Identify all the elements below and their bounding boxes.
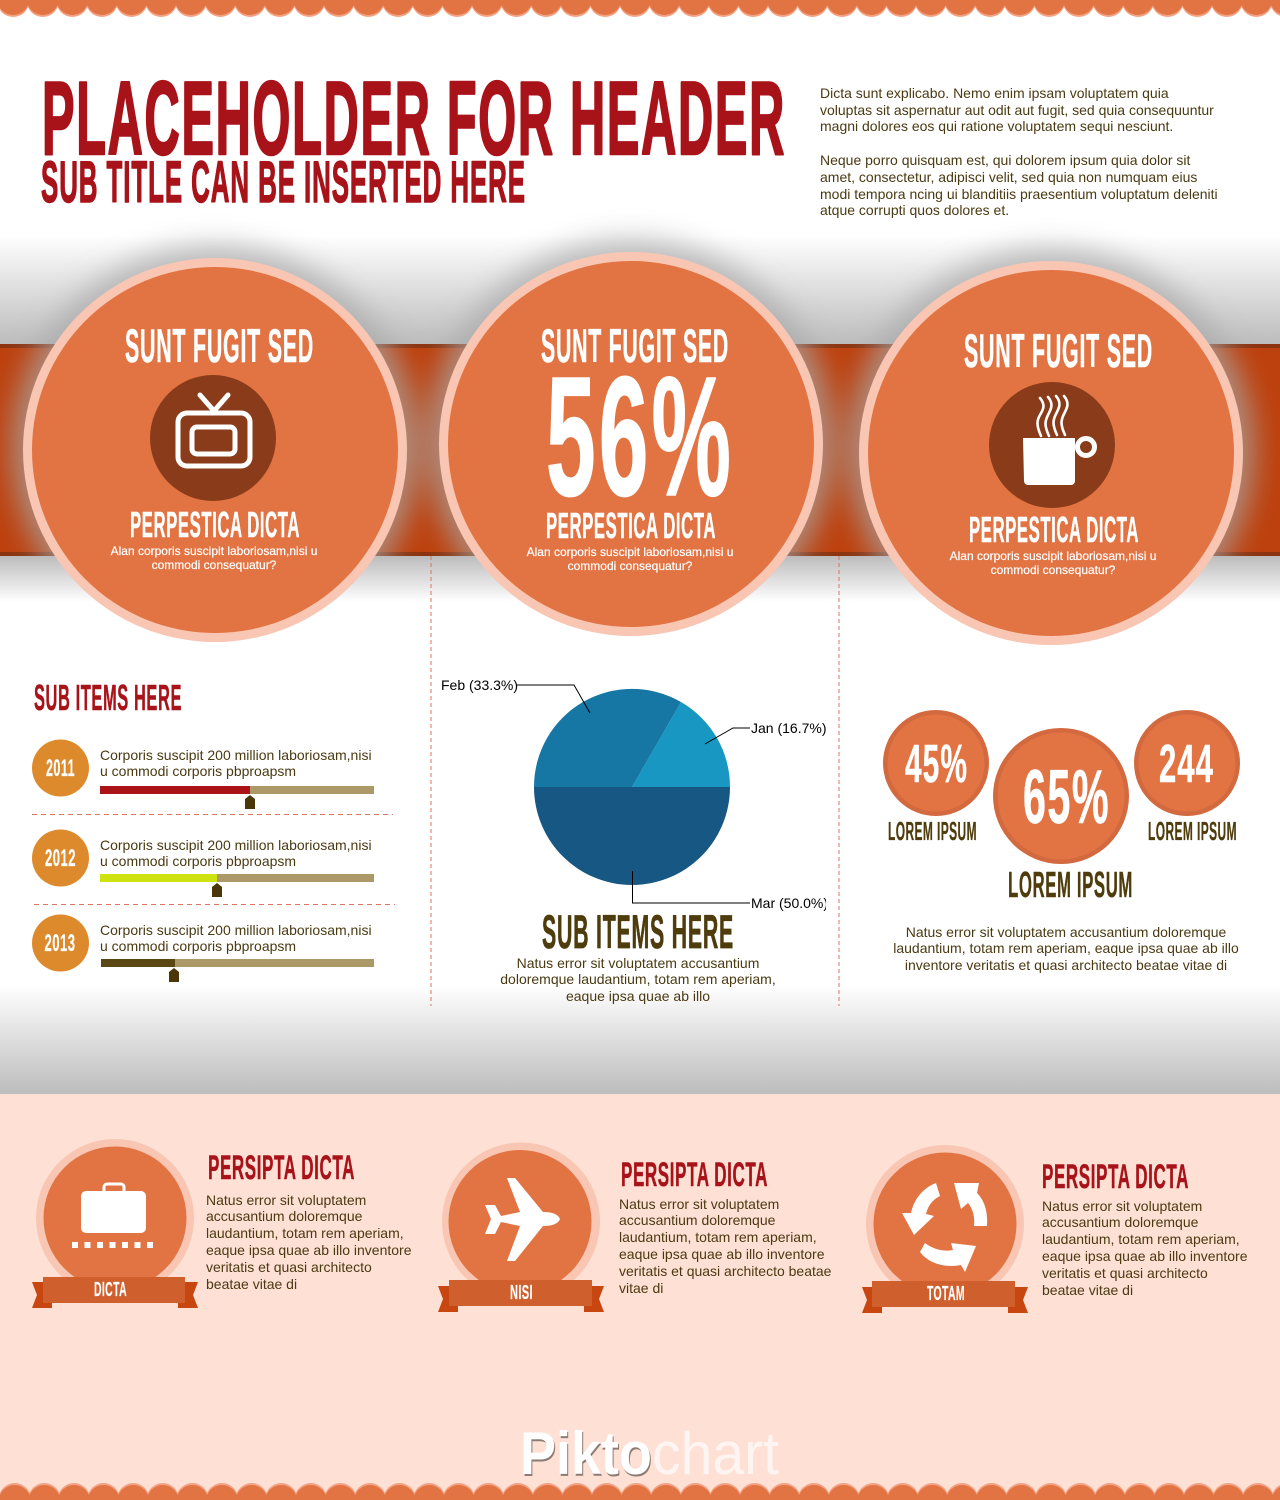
- panel: circle centre: SUNT FUGIT SED: [541, 319, 729, 372]
- text block: totam: beatae vitae di: [1042, 1282, 1133, 1298]
- text block: dicta: [206, 1149, 412, 1292]
- text block: nisi: laudantium, totam rem aperiam,: [619, 1229, 817, 1245]
- text block: dicta: beatae vitae di: [206, 1276, 297, 1292]
- text block: nisi: eaque ipsa quae ab illo inventore: [619, 1246, 825, 1262]
- item 2012: Corporis suscipit 200 million laboriosam,nisi: [100, 837, 372, 853]
- panel: pie chart: SUB ITEMS HERE: [542, 905, 734, 958]
- icon: suitcase: [72, 1184, 153, 1248]
- text block: nisi: accusantium doloremque: [619, 1212, 776, 1228]
- caption: right circle: commodi consequatur?: [991, 563, 1116, 577]
- panel: pie chart: [441, 677, 828, 1004]
- stat 45%: LOREM IPSUM: [888, 816, 977, 846]
- text: stats description: Natus error sit voluptatem accusantium doloremque: [906, 924, 1227, 940]
- intro text: Dicta sunt explicabo. Nemo enim ipsam voluptatem quia: [820, 85, 1169, 101]
- pie chart: Mar (50.0%): [751, 895, 828, 911]
- ribbon: dicta: DICTA: [94, 1279, 127, 1301]
- logo: Piktochart: Pikto: [521, 1422, 653, 1489]
- text: pie description: doloremque laudantium, totam rem aperiam,: [500, 971, 776, 987]
- stat 45%: [883, 710, 989, 846]
- panel: circle centre: PERPESTICA DICTA: [546, 505, 716, 546]
- panel: circle right: [859, 261, 1243, 645]
- caption: left circle: Alan corporis suscipit laboriosam,nisi u: [111, 544, 317, 558]
- intro text: atque corrupti quos dolores et.: [820, 202, 1009, 218]
- pie chart: Feb (33.3%): [441, 677, 518, 693]
- text: pie description: eaque ipsa quae ab illo: [566, 988, 710, 1004]
- text block: nisi: [619, 1156, 832, 1296]
- item 2013: [32, 914, 374, 982]
- ribbon: totam: [862, 1281, 1028, 1313]
- text block: totam: Natus error sit voluptatem: [1042, 1198, 1202, 1214]
- top scalloped border: [0, 0, 1280, 18]
- item 2012: u commodi corporis pbproapsm: [100, 853, 296, 869]
- text: stats description: inventore veritatis et quasi architecto beatae vitae di: [905, 957, 1227, 973]
- text block: totam: veritatis et quasi architecto: [1042, 1265, 1208, 1281]
- text block: nisi: vitae di: [619, 1280, 663, 1296]
- bottom scalloped border: [0, 1480, 1280, 1500]
- panel: circle left: [23, 258, 407, 642]
- stat 65%: [993, 728, 1133, 905]
- ribbon: nisi: [438, 1280, 604, 1312]
- text: stats description: laudantium, totam rem aperiam, eaque ipsa quae ab illo: [893, 940, 1239, 956]
- stat 65%: 65%: [1023, 755, 1110, 840]
- logo: Piktochart: [520, 1420, 779, 1489]
- item 2012: 2012: [45, 845, 76, 872]
- circle shadows: [0, 224, 1272, 556]
- text block: dicta: veritatis et quasi architecto: [206, 1259, 372, 1275]
- caption: left circle: commodi consequatur?: [152, 558, 277, 572]
- panel: timeline: SUB ITEMS HERE: [34, 677, 182, 718]
- caption: centre circle: Alan corporis suscipit laboriosam,nisi u: [527, 545, 733, 559]
- item 2011: u commodi corporis pbproapsm: [100, 763, 296, 779]
- panel: circle centre: [439, 252, 823, 636]
- ribbon band: [0, 344, 1280, 556]
- intro text: modi tempora ncing ui blanditiis praesentium voluptatum deleniti: [820, 186, 1218, 202]
- text block: nisi: veritatis et quasi architecto beatae: [619, 1263, 832, 1279]
- pie chart: Jan (16.7%): [751, 720, 826, 736]
- text block: totam: [1042, 1158, 1248, 1298]
- big number: 56%: [546, 342, 734, 532]
- panel: stats: [883, 710, 1240, 973]
- text: pie description: Natus error sit voluptatem accusantium: [517, 955, 759, 971]
- intro text: amet, consectetur, adipisci velit, sed quia non numquam eius: [820, 169, 1197, 185]
- icon: coffee cup: [989, 382, 1115, 508]
- item 2013: 2013: [44, 930, 76, 957]
- text: SUB TITLE CAN BE INSERTED HERE: [41, 150, 526, 215]
- intro text: magni dolores eos qui ratione voluptatem sequi nesciunt.: [820, 118, 1173, 134]
- item 2013: Corporis suscipit 200 million laboriosam,nisi: [100, 922, 372, 938]
- caption: centre circle: [527, 545, 733, 573]
- text block: dicta: eaque ipsa quae ab illo inventore: [206, 1242, 412, 1258]
- item 2011: [32, 740, 374, 809]
- text block: totam: laudantium, totam rem aperiam,: [1042, 1231, 1240, 1247]
- text block: dicta: accusantium doloremque: [206, 1208, 363, 1224]
- text block: dicta: Natus error sit voluptatem: [206, 1192, 366, 1208]
- text block: dicta: laudantium, totam rem aperiam,: [206, 1225, 404, 1241]
- pie chart: [441, 677, 828, 911]
- caption: right circle: Alan corporis suscipit laboriosam,nisi u: [950, 549, 1156, 563]
- ribbon: nisi: NISI: [510, 1282, 533, 1304]
- background bands: [0, 235, 1280, 1095]
- text block: dicta: PERSIPTA DICTA: [208, 1149, 355, 1187]
- icon: recycle arrows: [902, 1183, 987, 1272]
- text block: totam: eaque ipsa quae ab illo inventore: [1042, 1248, 1248, 1264]
- panel: circle left: SUNT FUGIT SED: [125, 319, 314, 372]
- intro text: [820, 85, 1218, 218]
- panel: bottom background: [0, 1094, 1280, 1500]
- icon: television: [150, 375, 276, 501]
- panel: circle left: PERPESTICA DICTA: [130, 504, 300, 545]
- text block: totam: accusantium doloremque: [1042, 1214, 1199, 1230]
- badge: dicta: [32, 1139, 198, 1308]
- stat 45%: 45%: [905, 734, 968, 794]
- caption: centre circle: commodi consequatur?: [568, 559, 693, 573]
- caption: right circle: [950, 549, 1156, 577]
- item 2011: 2011: [46, 755, 75, 782]
- item 2012: [32, 830, 374, 897]
- panel: timeline: [32, 677, 395, 982]
- text: stats description: [893, 924, 1239, 973]
- stat 244: [1134, 710, 1240, 846]
- intro text: voluptas sit aspernatur aut odit aut fugit, sed quia consequuntur: [820, 102, 1214, 118]
- item 2013: u commodi corporis pbproapsm: [100, 938, 296, 954]
- badge: nisi: [438, 1142, 604, 1312]
- logo: Piktochart: Pikto: [520, 1420, 652, 1487]
- intro text: Neque porro quisquam est, qui dolorem ipsum quia dolor sit: [820, 152, 1191, 168]
- panel: stats: LOREM IPSUM: [1008, 864, 1133, 905]
- text block: nisi: PERSIPTA DICTA: [621, 1156, 768, 1194]
- text block: nisi: Natus error sit voluptatem: [619, 1196, 779, 1212]
- logo: Piktochart: chart: [652, 1420, 779, 1487]
- ribbon: totam: TOTAM: [927, 1283, 965, 1305]
- badge: totam: [862, 1145, 1028, 1313]
- dashed dividers: [431, 556, 839, 1006]
- caption: left circle: [111, 544, 317, 572]
- item 2011: Corporis suscipit 200 million laboriosam,nisi: [100, 747, 372, 763]
- text: pie description: [500, 955, 776, 1004]
- stat 244: 244: [1159, 734, 1214, 794]
- ribbon: dicta: [32, 1277, 198, 1308]
- icon: plane: [485, 1178, 560, 1261]
